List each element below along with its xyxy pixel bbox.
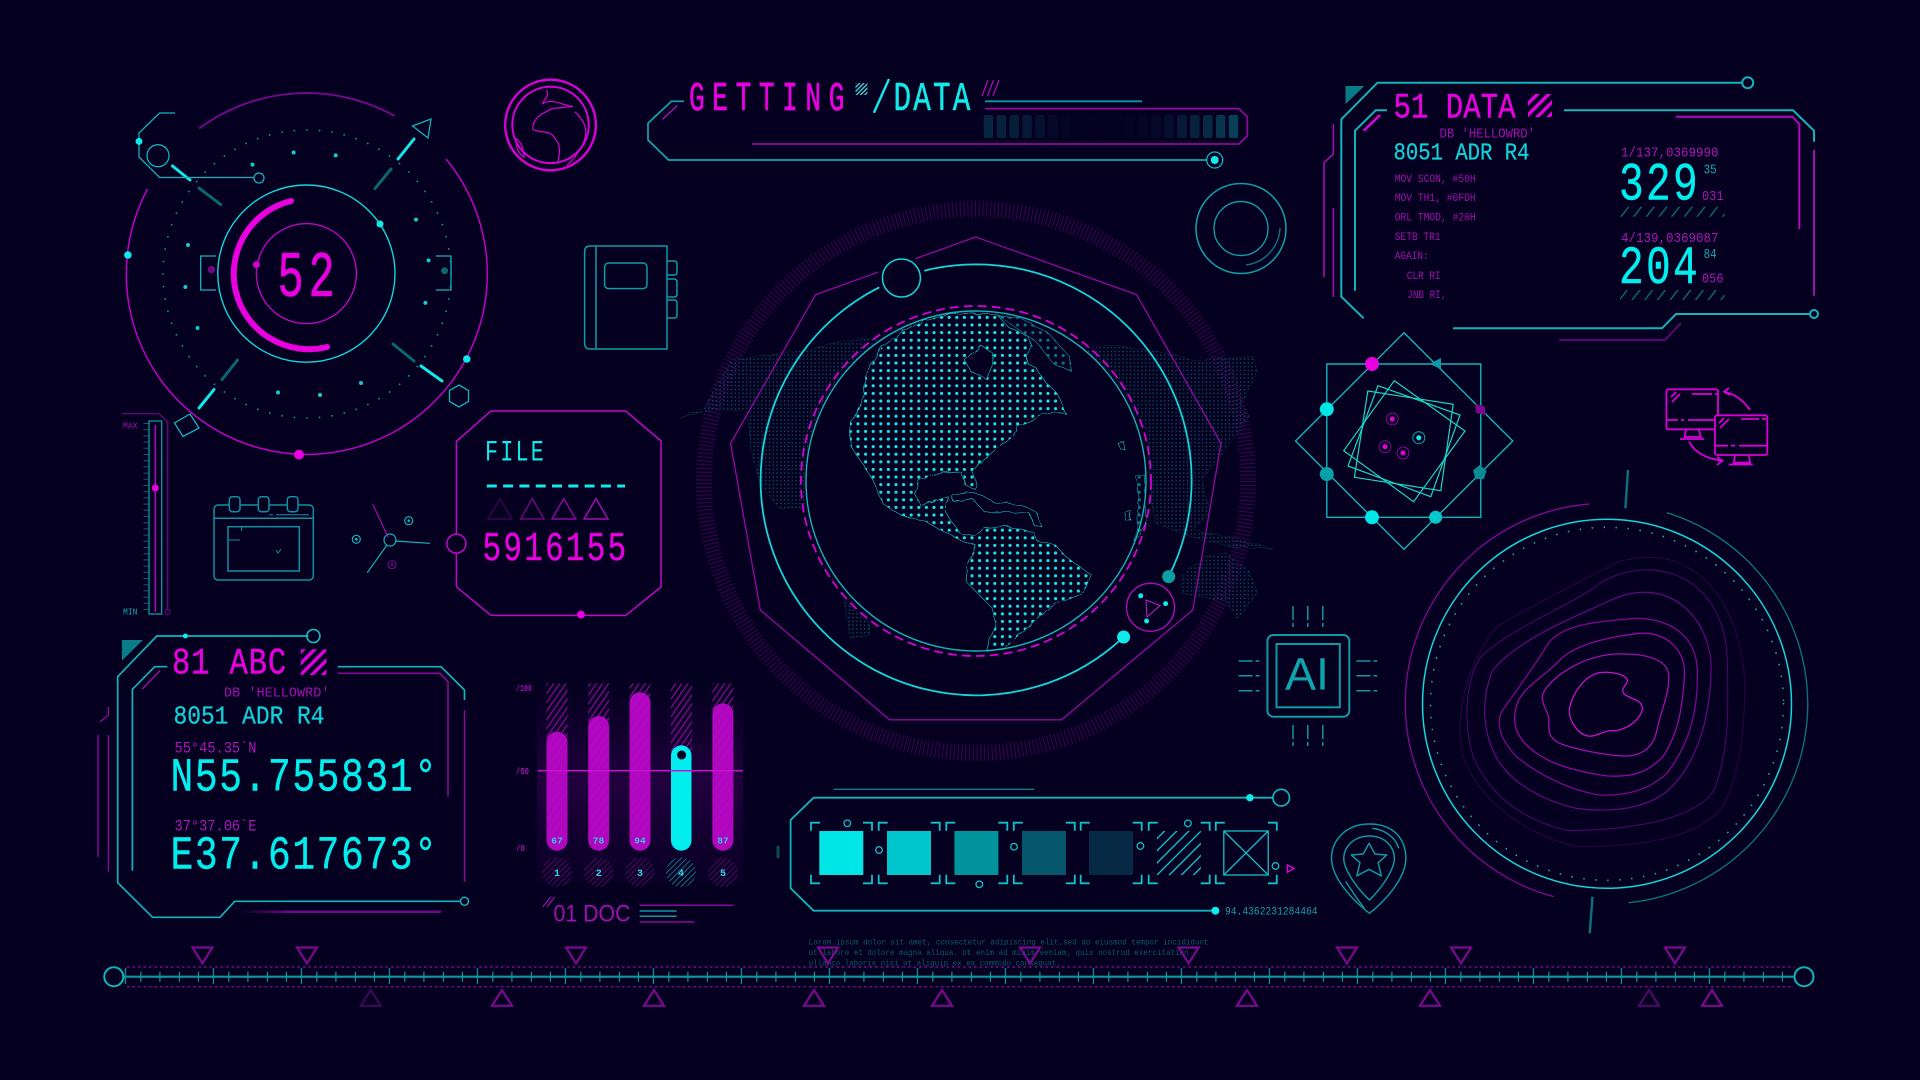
panel: colour swatches: 94.4362231284464 (1225, 906, 1318, 918)
timeline (104, 937, 1813, 1006)
axis labels (516, 684, 532, 854)
category circles: 5 (720, 869, 726, 880)
panel: 81 ABC coordinates: 37°37.06`E (174, 817, 256, 835)
01 DOC caption: 01 DOC (554, 901, 630, 928)
dim world map (680, 338, 1274, 638)
bar values: 94 (634, 836, 646, 846)
lorem ipsum note: ullamco laboris nisi ut aliquip ex ea commodo consequat. (809, 959, 1061, 969)
category circles: 2 (596, 869, 602, 880)
bar chart (516, 683, 743, 928)
code listing: CLR RI (1407, 271, 1441, 283)
code listing: ORL TMOD, #20H (1395, 212, 1476, 224)
title: GETTING /DATA (648, 77, 1247, 168)
readout 204: 204 (1619, 239, 1700, 300)
lorem ipsum note: ut labore et dolore magna aliqua. Ut enim ad minim veniam, quis nostrud exercitation (809, 948, 1189, 958)
title: GETTING /DATA: GETTING (689, 77, 852, 123)
panel: 51 DATA readout: 51 DATA (1394, 88, 1516, 128)
panel: 81 ABC coordinates: 81 ABC (172, 644, 287, 686)
category circles: 1 (554, 869, 560, 880)
segmented progress bar (984, 115, 1238, 138)
icon: three-arm node (352, 504, 430, 573)
code listing: MOV SCON, #50H (1395, 174, 1476, 186)
bar values: 87 (717, 836, 729, 846)
slider: MAX to MIN gauge: MIN (123, 608, 138, 618)
icon: AI chip: AI (1285, 648, 1329, 699)
icon: calendar (214, 497, 313, 580)
icon: map pin with star (1332, 824, 1406, 913)
tick ring (704, 209, 1248, 753)
icon: synced monitors (1666, 388, 1767, 465)
readout 329: 329 (1619, 156, 1700, 216)
bar values: 67 (551, 836, 563, 846)
icon: rotating squares diamond (1296, 333, 1513, 549)
panel: 81 ABC coordinates: 55°45.35`N (174, 739, 256, 757)
readout 204: 4/139,0369087 (1621, 231, 1718, 247)
axis labels: /50 (516, 767, 529, 777)
hatched bar tracks (546, 683, 733, 755)
slider: MAX to MIN gauge: MAX (123, 422, 138, 432)
code listing: JNB RI, (1407, 290, 1446, 302)
code listing: SETB TR1 (1395, 232, 1441, 244)
icon: concentric ring (1196, 184, 1286, 274)
HUD dashboard canvas (97, 76, 1819, 1007)
dial value: 52 (278, 242, 340, 316)
category circles: 3 (637, 869, 643, 880)
panel: 51 DATA readout: 8051 ADR R4 (1394, 140, 1530, 167)
bright Americas dots (840, 310, 1150, 660)
triangle satellite (1126, 583, 1174, 631)
icon: AI chip (1239, 606, 1378, 746)
code listing: AGAIN: (1395, 251, 1429, 263)
axis labels: /0 (516, 844, 525, 854)
panel: 51 DATA readout: DB 'HELLOWRD' (1440, 127, 1535, 143)
slider: MAX to MIN gauge (122, 414, 170, 618)
title: GETTING /DATA: DATA (894, 77, 972, 123)
readout 329: 35 (1704, 162, 1717, 178)
contour lines (1460, 557, 1745, 847)
readout 329: 1/137,0369990 (1621, 146, 1718, 162)
panel: central globe (680, 209, 1300, 753)
panel: FILE counter: 5916155 (482, 527, 628, 573)
panel: 81 ABC coordinates (98, 630, 468, 917)
code listing (1395, 174, 1476, 302)
panel: 81 ABC coordinates: 8051 ADR R4 (174, 701, 324, 731)
panel: 81 ABC coordinates: N55.755831° (170, 753, 438, 806)
bar values: 78 (593, 836, 604, 846)
orbit marker (877, 254, 925, 302)
panel: 51 DATA readout (1324, 77, 1818, 340)
panel: radial dial with value 52 (124, 93, 487, 460)
category circles (542, 857, 738, 887)
panel: colour swatches (776, 789, 1318, 918)
code listing: MOV TH1, #0FDH (1395, 193, 1476, 205)
category circles: 4 (678, 869, 684, 880)
panel: topographic radar (1405, 470, 1808, 933)
readout 204: 056 (1702, 272, 1724, 288)
bar values (551, 836, 729, 846)
lorem ipsum note (809, 937, 1209, 969)
timeline markers (192, 948, 1722, 1006)
readout 329: 031 (1702, 189, 1724, 205)
panel: FILE counter (447, 411, 661, 619)
icon: notebook (585, 246, 677, 349)
axis labels: /100 (516, 684, 532, 694)
bars (546, 692, 733, 851)
panel: FILE counter: FILE (485, 437, 546, 471)
readout 204: 84 (1704, 247, 1717, 263)
panel: 81 ABC coordinates: DB 'HELLOWRD' (224, 686, 330, 702)
01 DOC caption (543, 897, 733, 928)
icon: small magenta earth (505, 80, 596, 170)
panel: 81 ABC coordinates: E37.617673° (170, 830, 438, 883)
lorem ipsum note: Lorem ipsum dolor sit amet, consectetur adipiscing elit,sed do eiusmod tempor incididunt (809, 937, 1209, 947)
